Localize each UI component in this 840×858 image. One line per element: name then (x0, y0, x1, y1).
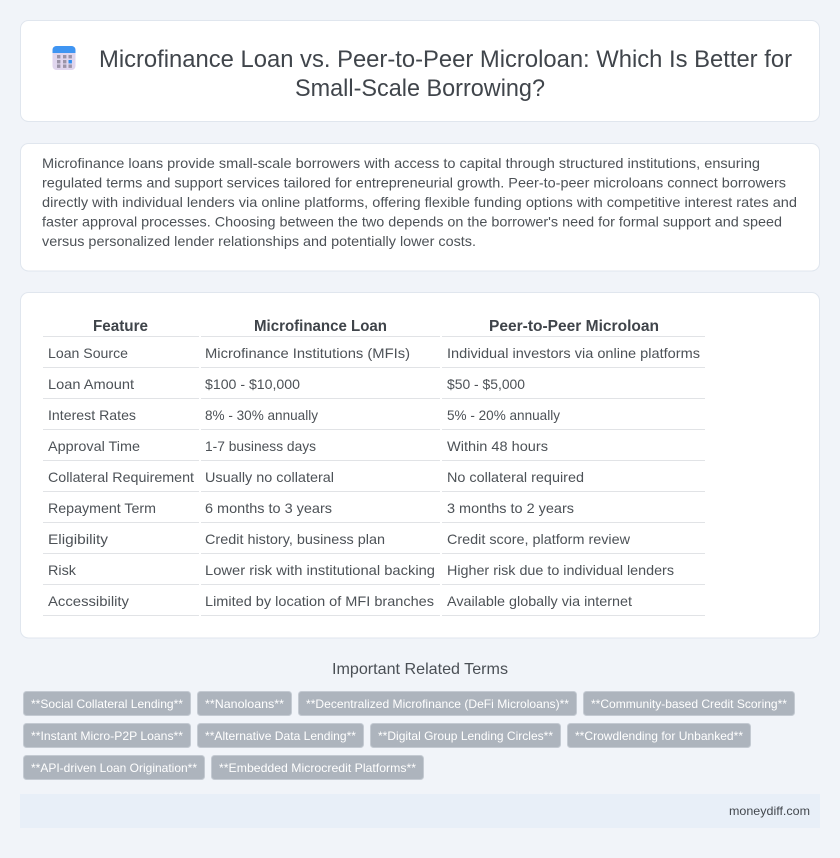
title (99, 46, 792, 102)
table row: loan amount: $100 - $10,000 (205, 376, 300, 392)
table row: risk: Lower risk with institutional backing (205, 562, 435, 578)
panel: comparison table (20, 292, 820, 638)
table row: interest rates: 8% - 30% annually (205, 407, 318, 423)
table row: collateral requirement: Collateral Requirement (48, 469, 194, 485)
footer (20, 794, 820, 828)
table row: approval time: Approval Time (48, 438, 140, 454)
tag: **Instant Micro-P2P Loans** (31, 729, 183, 743)
table row: risk (48, 562, 674, 578)
tag: **Decentralized Microfinance (DeFi Microloans)** (306, 697, 569, 711)
table row: accessibility: Limited by location of MFI branches (205, 593, 434, 609)
tag: **API-driven Loan Origination** (31, 761, 197, 775)
table row: collateral requirement (48, 469, 584, 485)
tag (568, 724, 750, 748)
table row: loan source (48, 345, 700, 361)
table row: loan source: Individual investors via online platforms (447, 345, 700, 361)
tag (370, 724, 560, 748)
table row: eligibility: Credit score, platform review (447, 531, 631, 547)
table row: eligibility: Credit history, business plan (205, 531, 385, 547)
table row: loan source: Loan Source (48, 345, 128, 361)
table row: loan amount: $50 - $5,000 (447, 376, 525, 392)
panel: description (20, 144, 820, 271)
tag (24, 692, 190, 716)
footer: moneydiff.com (729, 804, 810, 818)
table row: collateral requirement: No collateral required (447, 469, 584, 485)
tag (212, 756, 424, 780)
tag (298, 692, 576, 716)
tag: **Crowdlending for Unbanked** (575, 729, 743, 743)
table header (93, 318, 659, 335)
table header: Feature (93, 318, 148, 335)
table row: interest rates: 5% - 20% annually (447, 407, 560, 423)
panel: related term tags (24, 692, 794, 780)
tag: **Digital Group Lending Circles** (378, 729, 553, 743)
title: Small-Scale Borrowing? (295, 75, 545, 102)
table row: interest rates (48, 407, 560, 423)
table row: risk: Higher risk due to individual lenders (447, 562, 674, 578)
text block: description: Microfinance loans provide small-scale borrowers with access to capital through structured institutions, ensuring (42, 155, 760, 171)
tag (198, 692, 292, 716)
heading: related terms: Important Related Terms (332, 661, 508, 678)
table row: repayment term: Repayment Term (48, 500, 156, 516)
icon: calendar (52, 46, 76, 70)
table row: risk: Risk (48, 562, 77, 578)
table row: repayment term: 3 months to 2 years (447, 500, 574, 516)
table row: accessibility: Accessibility (48, 593, 129, 609)
tag (24, 724, 190, 748)
table row: repayment term (48, 500, 574, 516)
table row: repayment term: 6 months to 3 years (205, 500, 332, 516)
table row: loan amount: Loan Amount (48, 376, 134, 392)
table row: eligibility (48, 531, 631, 547)
tag: **Social Collateral Lending** (31, 697, 183, 711)
table row: eligibility: Eligibility (48, 531, 108, 547)
table row: interest rates: Interest Rates (48, 407, 136, 423)
table row: loan source: Microfinance Institutions (MFIs) (205, 345, 410, 361)
tag: **Alternative Data Lending** (205, 729, 356, 743)
table header: Peer-to-Peer Microloan (489, 318, 659, 335)
table row: approval time: 1-7 business days (205, 438, 316, 454)
text block: description: versus personalized lender relationships and potentially lower costs. (42, 233, 476, 249)
table row: loan amount (48, 376, 525, 392)
tag (198, 724, 364, 748)
text block: description: directly with individual lenders via online platforms, offering flexible funding options with competitive interest rates and (42, 194, 797, 210)
tag: **Community-based Credit Scoring** (591, 697, 787, 711)
table header: Microfinance Loan (254, 318, 387, 335)
tag (24, 756, 204, 780)
tag (584, 692, 794, 716)
tag: **Embedded Microcredit Platforms** (219, 761, 416, 775)
text block: description: faster approval processes. Choosing between the two depends on the borrower's need for formal support and speed (42, 214, 782, 230)
text block: description (42, 155, 797, 249)
table row: accessibility: Available globally via internet (447, 593, 632, 609)
table row: approval time: Within 48 hours (447, 438, 548, 454)
table row: collateral requirement: Usually no collateral (205, 469, 334, 485)
table row: accessibility (48, 593, 632, 609)
title: Microfinance Loan vs. Peer-to-Peer Microloan: Which Is Better for (99, 46, 792, 73)
tag: **Nanoloans** (205, 697, 284, 711)
text block: description: regulated terms and support services tailored for entrepreneurial growth. Peer-to-peer microloans connect borrowers (42, 174, 786, 190)
table row: approval time (48, 438, 548, 454)
panel: header (20, 20, 820, 122)
